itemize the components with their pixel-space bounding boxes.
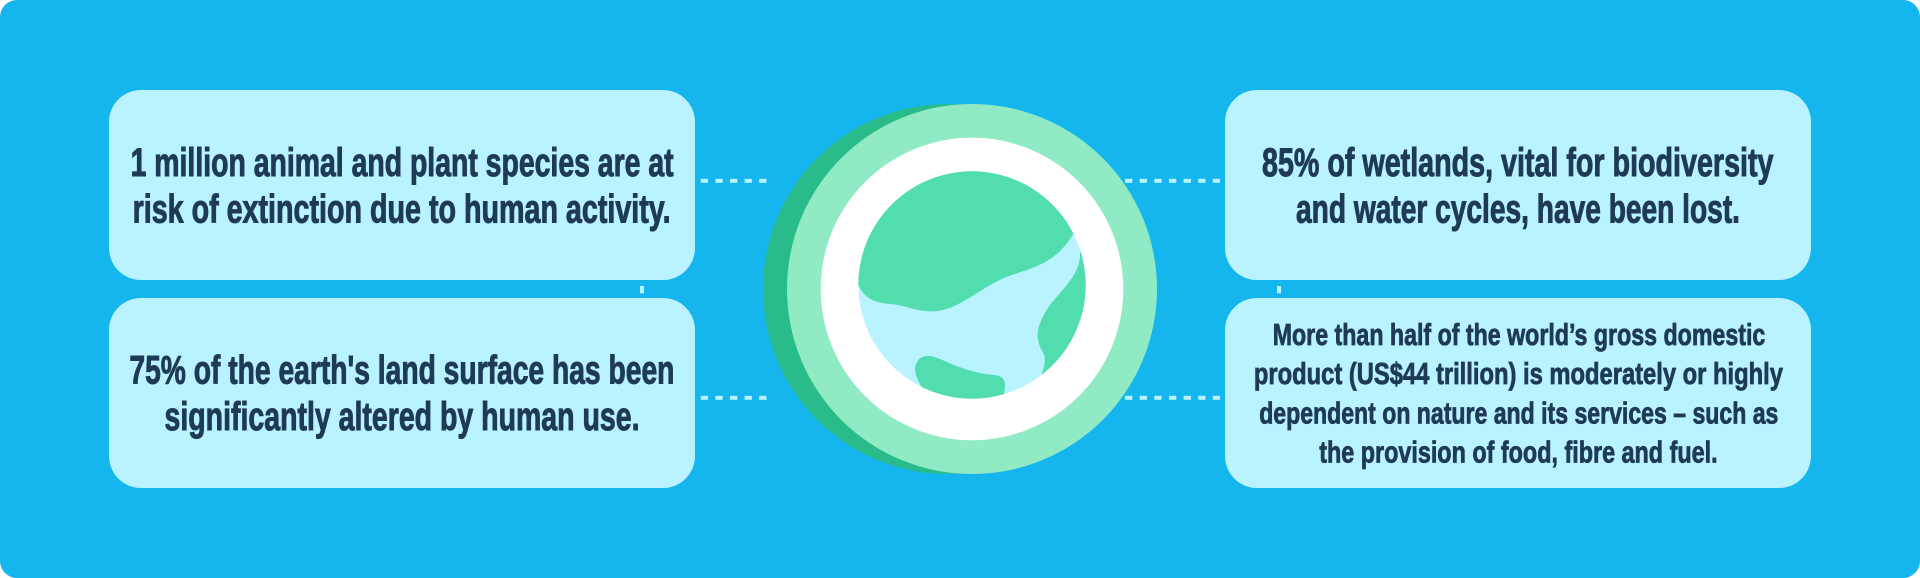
globe ocean [858,171,1086,399]
globe shadow [763,104,1133,474]
card text: 75% of the earth's land surface has been [129,348,674,392]
panel: gross domestic product [1225,298,1811,488]
connector lines [640,179,1281,400]
globe outer ring [787,104,1157,474]
card text [1262,141,1774,232]
panel: species extinction [109,90,695,280]
card text: risk of extinction due to human activity. [133,188,671,232]
card text: significantly altered by human use. [164,395,640,439]
card text: and water cycles, have been lost. [1296,188,1740,232]
card text [129,348,674,439]
card background [1225,298,1811,488]
card text: 1 million animal and plant species are at [131,141,674,185]
globe white ring [821,138,1123,440]
card text: product (US$44 trillion) is moderately or highly [1254,357,1783,391]
panel: wetlands [1225,90,1811,280]
card text: More than half of the world’s gross domestic [1273,318,1765,352]
panel: land surface [109,298,695,488]
card text: the provision of food, fibre and fuel. [1319,435,1718,469]
card background [109,298,695,488]
card background [1225,90,1811,280]
card background [109,90,695,280]
globe land masses [858,171,1086,399]
card text [1254,318,1783,469]
icon: earth globe [763,104,1157,474]
card text [131,141,674,232]
